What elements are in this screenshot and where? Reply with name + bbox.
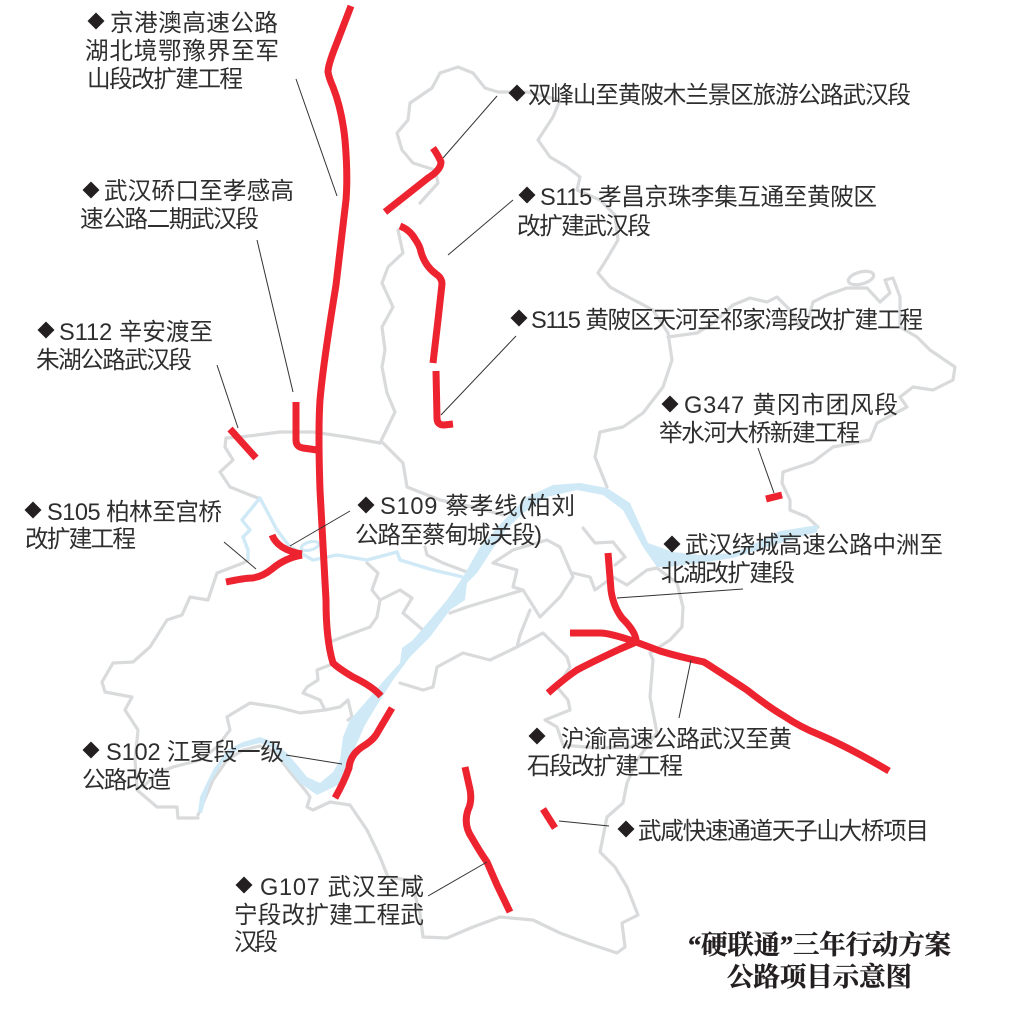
- road: G347 bridge: [766, 495, 782, 499]
- label: S105: 改扩建工程: [25, 526, 136, 553]
- road: S112: [230, 429, 256, 458]
- river: Han loop: [300, 540, 320, 552]
- label: S102: [82, 739, 284, 794]
- label: Qiaokou-Xiaogan: 武汉硚口至孝感高: [104, 178, 294, 205]
- road: S102: [335, 708, 392, 798]
- river: Yangtze: [198, 483, 818, 813]
- label: ring expressway: 北湖改扩建段: [661, 560, 795, 587]
- road: Hu-Yu branch: [548, 642, 636, 693]
- road: S105: [226, 555, 302, 582]
- road: S109: [272, 535, 302, 554]
- label: S115 Xiaochang: [517, 184, 877, 240]
- label: Jing-Gang-Ao: 京港澳高速公路: [110, 10, 278, 37]
- label: Jing-Gang-Ao: [85, 10, 279, 93]
- title: “硬联通”三年行动方案: [688, 930, 952, 960]
- label: S109: 公路至蔡甸城关段): [355, 522, 542, 549]
- label: Hu-Yu: 石段改扩建工程: [527, 753, 683, 780]
- label: S112: [36, 319, 213, 374]
- map: district boundaries: [102, 67, 955, 953]
- label: ring expressway: 武汉绕城高速公路中洲至: [685, 532, 943, 559]
- label: S109: S109 蔡孝线(柏刘: [380, 493, 575, 520]
- label: S109: [355, 493, 575, 549]
- label: G347: 举水河大桥新建工程: [659, 420, 860, 447]
- label: ring expressway: [661, 532, 943, 587]
- label: G107: 汉段: [234, 929, 278, 956]
- label: S102: S102 江夏段一级: [106, 739, 284, 766]
- road: G107: [465, 767, 510, 912]
- label: Shuangfengshan: 双峰山至黄陂木兰景区旅游公路武汉段: [528, 82, 911, 109]
- label: Hu-Yu: 沪渝高速公路武汉至黄: [561, 726, 792, 753]
- river: Han: [242, 498, 463, 577]
- leader lines: [217, 79, 774, 896]
- label: G107: G107 武汉至咸: [260, 874, 424, 901]
- title: 公路项目示意图: [727, 962, 912, 992]
- label: Hu-Yu: [527, 726, 792, 780]
- road: ring expressway: [608, 553, 636, 642]
- road: Qiaokou-Xiaogan spur: [296, 402, 317, 450]
- road: S115 Huangpi: [436, 371, 453, 425]
- title: [688, 930, 952, 992]
- label: Qiaokou-Xiaogan: 速公路二期武汉段: [80, 206, 259, 233]
- label: G347: G347 黄冈市团风段: [684, 392, 898, 419]
- label: S112: 朱湖公路武汉段: [36, 347, 192, 374]
- label: Jing-Gang-Ao: 山段改扩建工程: [87, 66, 243, 93]
- road: Shuangfengshan tourist road: [385, 148, 441, 212]
- label: S115 Xiaochang: 改扩建武汉段: [517, 213, 651, 240]
- label: S102: 公路改造: [82, 767, 171, 794]
- label: Jing-Gang-Ao: 湖北境鄂豫界至军: [85, 38, 279, 65]
- label: G347: [659, 392, 898, 447]
- label: S105: S105 柏林至宫桥: [47, 499, 222, 526]
- label: G107: 宁段改扩建工程武: [234, 902, 424, 929]
- label: S112: S112 辛安渡至: [59, 319, 213, 346]
- road: S115 Xiaochang: [400, 226, 442, 363]
- road: Jing-Gang-Ao expressway: [319, 6, 381, 696]
- label: S115 Xiaochang: S115 孝昌京珠李集互通至黄陂区: [540, 184, 877, 211]
- road: Hu-Yu expressway: [570, 633, 889, 771]
- label: S105: [24, 499, 222, 553]
- label: Wuxian: 武咸快速通道天子山大桥项目: [638, 818, 929, 845]
- label: Qiaokou-Xiaogan: [80, 178, 294, 233]
- road: Wuxian Tianzishan bridge: [543, 809, 555, 828]
- label: G107: [234, 874, 424, 956]
- label: S115 Huangpi: S115 黄陂区天河至祁家湾段改扩建工程: [531, 307, 923, 334]
